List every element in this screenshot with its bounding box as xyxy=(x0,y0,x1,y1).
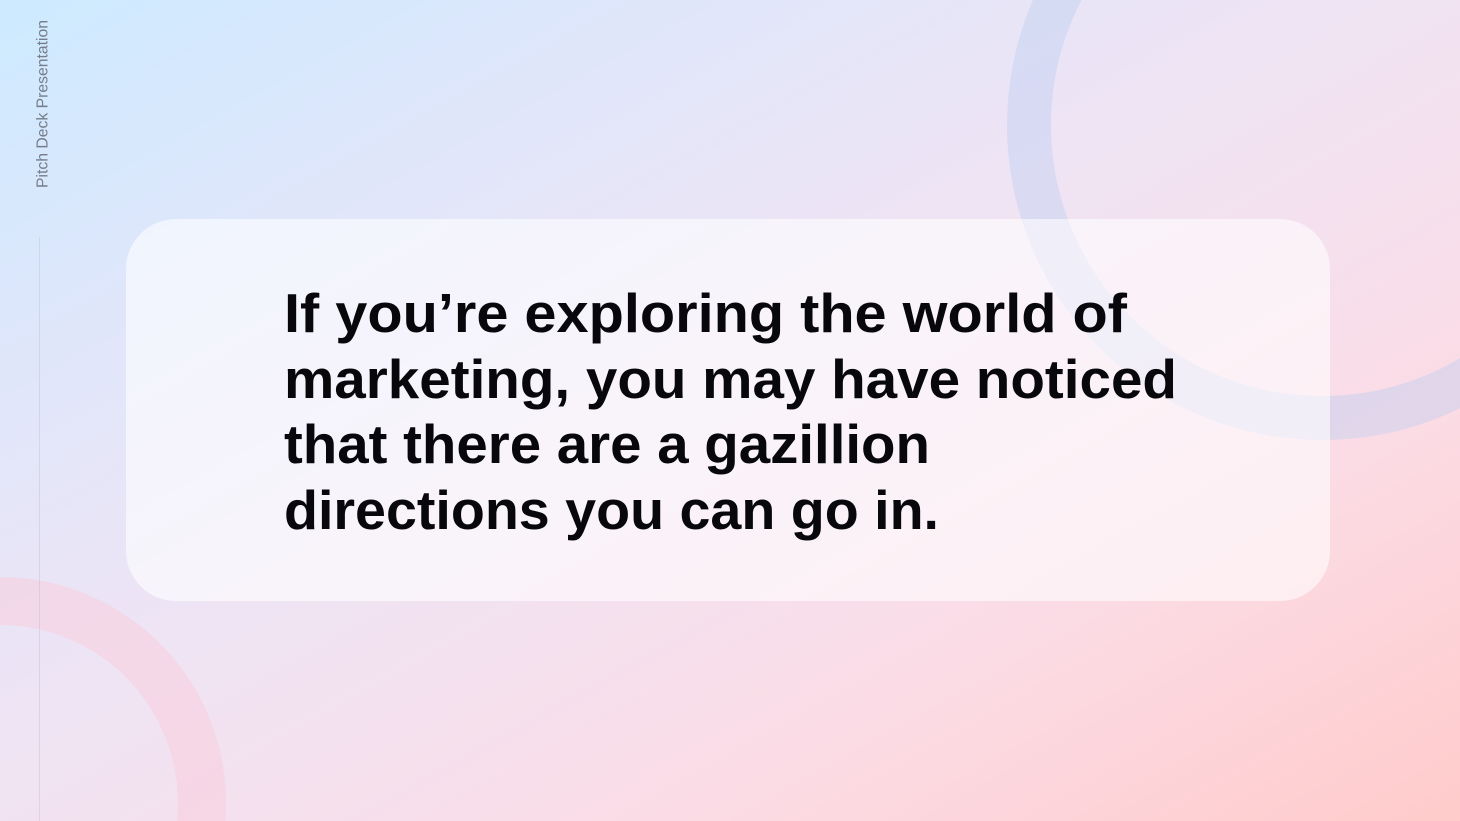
decorative ring: bottom left xyxy=(0,577,226,821)
quote text: marketing, you may have noticed xyxy=(284,348,1177,410)
quote text: If you’re exploring the world of xyxy=(284,282,1128,344)
quote text: directions you can go in. xyxy=(284,479,939,541)
vertical rule xyxy=(38,237,40,821)
side label: Pitch Deck Presentation xyxy=(34,20,52,188)
quote text xyxy=(284,282,1177,541)
quote text: that there are a gazillion xyxy=(284,413,930,475)
quote card xyxy=(126,219,1330,601)
decorative ring: top right xyxy=(1007,0,1460,440)
